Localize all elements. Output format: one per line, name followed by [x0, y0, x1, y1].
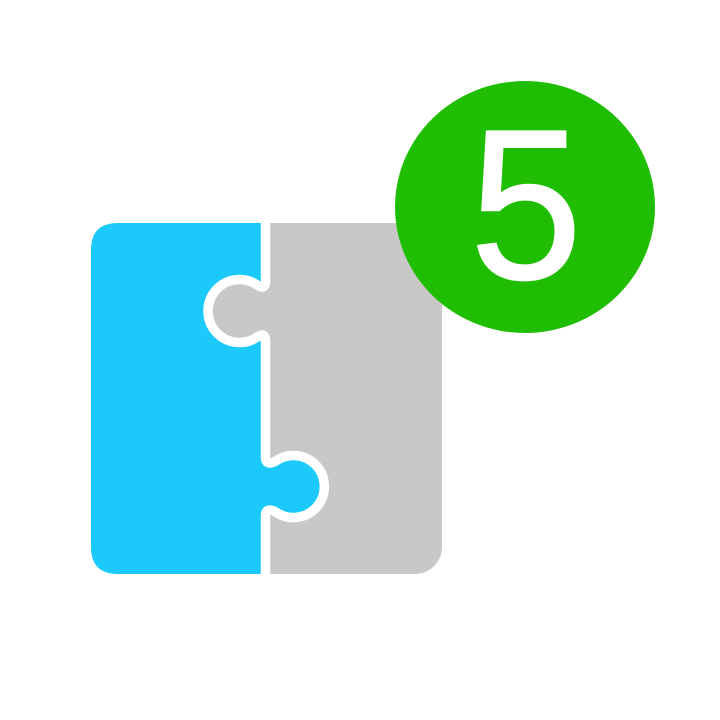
puzzle piece: grey right: [91, 223, 442, 574]
tab: blue knob: [262, 459, 325, 514]
badge number: 5: [470, 86, 582, 325]
seam: white cut line: [208, 221, 324, 576]
puzzle piece: blue left: [91, 223, 324, 574]
icon: puzzle square: [91, 221, 442, 576]
badge circle: [395, 81, 655, 333]
badge: green circle with number: [395, 81, 655, 333]
